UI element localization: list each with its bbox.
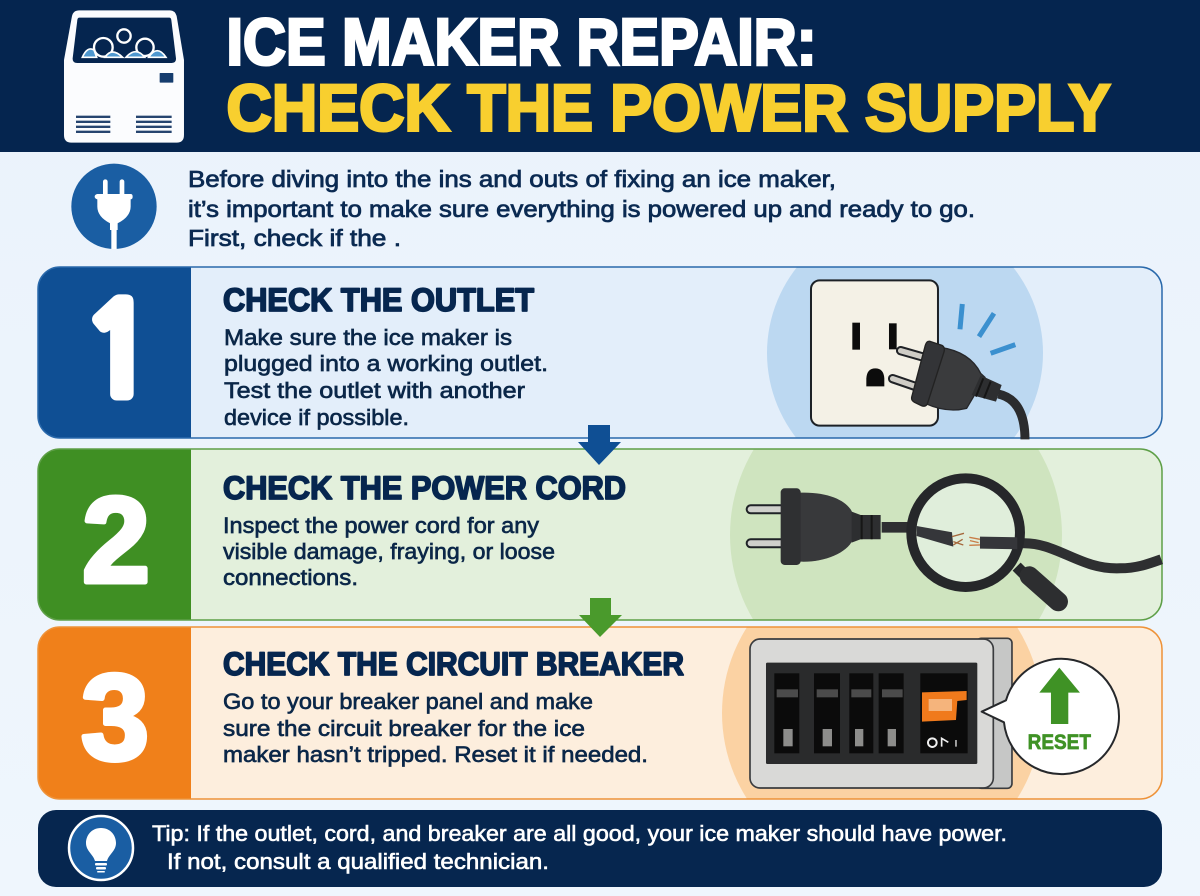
heading: check the outlet: CHECK THE OUTLET bbox=[223, 282, 534, 318]
number 1: 1 bbox=[81, 289, 157, 414]
tip text: If not, consult a qualified technician. bbox=[167, 849, 549, 874]
heading: check the circuit breaker: CHECK THE CIRCUIT BREAKER bbox=[223, 646, 684, 682]
arrow: step 2 to step 3 bbox=[579, 598, 622, 637]
tip text: Tip: If the outlet, cord, and breaker are all good, your ice maker should have power. bbox=[152, 821, 1007, 846]
title line 1: ICE MAKER REPAIR: bbox=[226, 4, 816, 78]
body text step 1 bbox=[224, 325, 548, 430]
intro section bbox=[71, 164, 975, 251]
title line 2: CHECK THE POWER SUPPLY bbox=[226, 70, 1110, 144]
callout: reset: RESET bbox=[1028, 731, 1091, 754]
icon: light bulb bbox=[69, 816, 133, 880]
body text step 1: Make sure the ice maker is bbox=[224, 325, 512, 350]
number 3: 3 bbox=[81, 649, 149, 785]
panel: step 2 check the power cord bbox=[37, 448, 1163, 621]
body text step 1: plugged into a working outlet. bbox=[224, 351, 548, 376]
body text step 3: Go to your breaker panel and make bbox=[223, 689, 593, 714]
panel: step 3 check the circuit breaker bbox=[37, 626, 1163, 800]
body text step 3: sure the circuit breaker for the ice bbox=[223, 716, 585, 741]
callout: reset bbox=[982, 659, 1119, 774]
heading: check the power cord: CHECK THE POWER CORD bbox=[223, 470, 626, 506]
panel: step 1 check the outlet bbox=[37, 266, 1163, 440]
body text step 3 bbox=[223, 689, 648, 767]
icon: plug in circle bbox=[71, 164, 157, 249]
intro text: First, check if the . bbox=[188, 225, 401, 251]
intro text bbox=[188, 166, 975, 251]
intro text: Before diving into the ins and outs of fixing an ice maker, bbox=[188, 166, 836, 192]
body text step 1: Test the outlet with another bbox=[224, 378, 525, 403]
body text step 3: maker hasn’t tripped. Reset it if needed. bbox=[223, 742, 648, 767]
icon: ice maker machine bbox=[64, 10, 184, 143]
tip bar bbox=[38, 810, 1162, 887]
number 2: 2 bbox=[82, 472, 150, 608]
intro text: it’s important to make sure everything is powered up and ready to go. bbox=[188, 196, 975, 222]
body text step 2: connections. bbox=[223, 565, 358, 590]
body text step 1: device if possible. bbox=[224, 405, 409, 430]
tip text bbox=[152, 821, 1007, 874]
header banner bbox=[0, 0, 1200, 152]
illustration: breaker panel bbox=[750, 638, 1119, 788]
body text step 2: Inspect the power cord for any bbox=[223, 513, 539, 538]
illustration: outlet with plug bbox=[811, 280, 1025, 439]
body text step 2 bbox=[223, 513, 555, 590]
illustration: damaged cord under magnifier bbox=[751, 478, 1161, 602]
body text step 2: visible damage, fraying, or loose bbox=[223, 539, 555, 564]
arrow: step 1 to step 2 bbox=[578, 425, 621, 465]
